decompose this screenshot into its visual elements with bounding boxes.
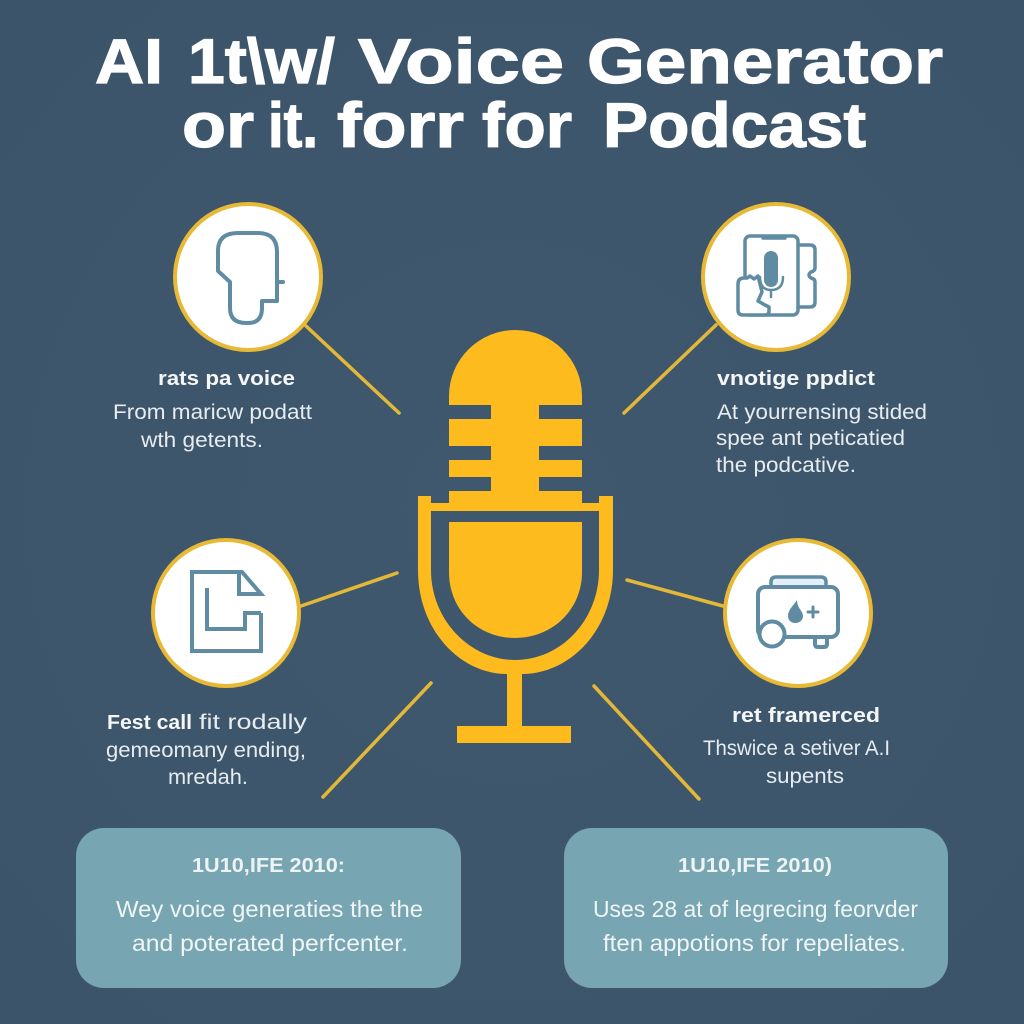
panel: bottom right	[564, 828, 948, 988]
text: top right: vnotige ppdict	[717, 368, 875, 390]
title: 1t\w/	[188, 27, 335, 97]
panel: bottom right: ften appotions for repeliates.	[603, 930, 906, 956]
title: for	[482, 91, 572, 161]
title: forr	[337, 91, 464, 161]
text: top left	[113, 368, 312, 452]
feature: middle left	[106, 540, 308, 789]
icon: document	[153, 540, 299, 686]
text: top left: wth getents.	[140, 429, 263, 452]
title: Generator	[587, 27, 943, 97]
title: Voice	[358, 27, 564, 97]
text: top right	[716, 368, 927, 477]
panel: bottom right: Uses 28 at of legrecing feorvder	[593, 896, 918, 922]
text: middle left: gemeomany ending,	[106, 739, 306, 762]
title: it.	[268, 91, 318, 161]
panel: bottom left: and poterated perfcenter.	[132, 930, 408, 956]
title	[95, 27, 943, 161]
text: top left: From maricw podatt	[113, 401, 312, 424]
text: middle left: Fest call	[107, 712, 192, 734]
icon: head profile	[175, 204, 321, 350]
title: Podcast	[603, 91, 866, 161]
panel: bottom left	[76, 828, 461, 988]
text: middle right: ret framerced	[732, 705, 880, 727]
text: middle right	[703, 705, 890, 788]
title: AI	[95, 27, 163, 97]
title: or	[182, 91, 254, 161]
text: top right: spee ant peticatied	[716, 427, 905, 450]
text: top right: At yourrensing stided	[717, 401, 927, 424]
panel: bottom left: Wey voice generaties the the	[116, 896, 423, 922]
text: middle left: fit rodally	[199, 711, 308, 734]
text: top left: rats pa voice	[158, 368, 295, 390]
central microphone	[418, 330, 613, 743]
text: middle left: mredah.	[168, 766, 248, 789]
panel: bottom right: 1U10,IFE 2010)	[678, 855, 832, 877]
text: middle right: Thswice a setiver A.I	[703, 737, 890, 760]
feature: middle right	[703, 540, 890, 788]
icon: phone with microphone	[703, 204, 849, 350]
icon: device with drop and plus	[725, 540, 871, 686]
text: middle left	[106, 711, 308, 789]
text: top right: the podcative.	[716, 454, 856, 477]
feature: top left	[113, 204, 321, 452]
feature: top right	[703, 204, 927, 477]
text: middle right: supents	[766, 765, 844, 788]
panel: bottom left: 1U10,IFE 2010:	[192, 855, 345, 877]
connector lines	[301, 325, 723, 799]
